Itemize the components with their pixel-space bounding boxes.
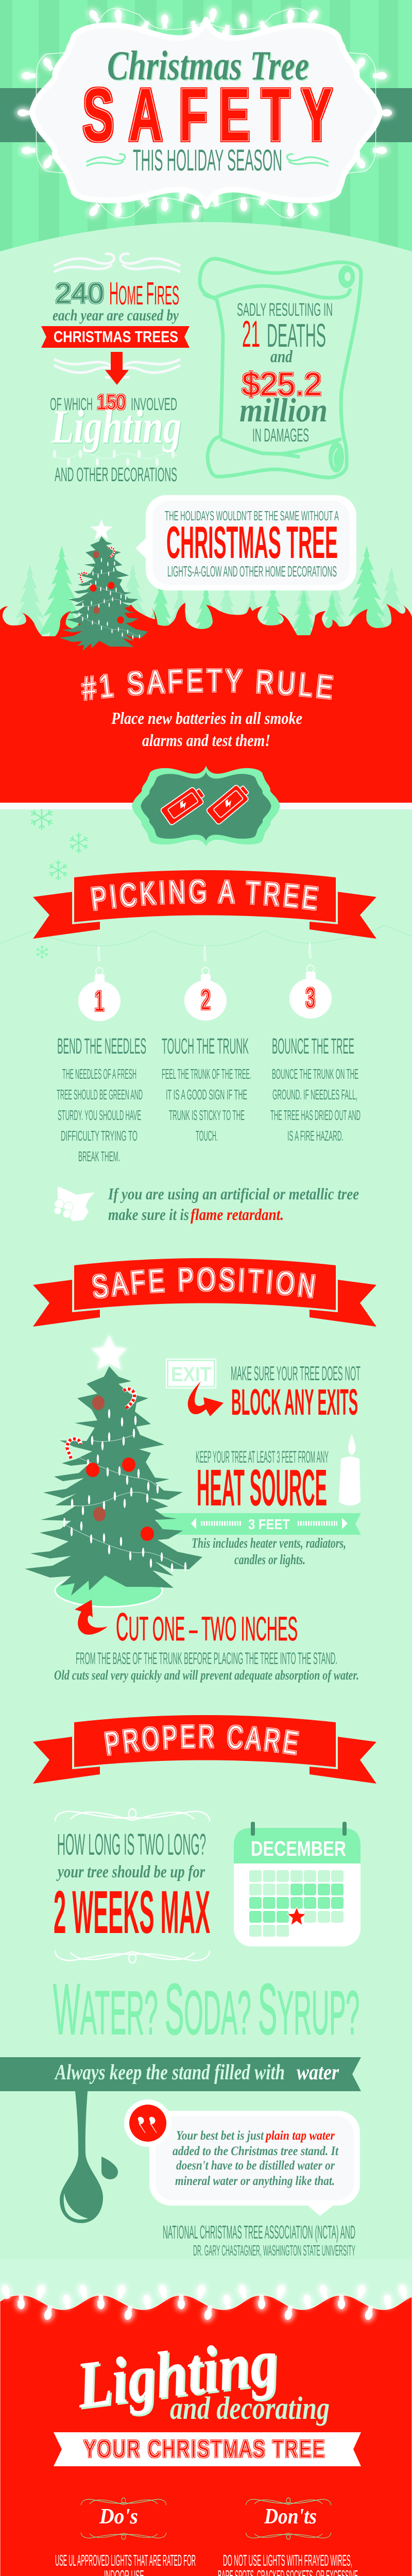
quote text (173, 2129, 339, 2188)
text: batteries line 2: alarms and test them! (142, 732, 270, 750)
text: BEND THE NEEDLES (57, 1034, 146, 1059)
bulbs (0, 2282, 410, 2323)
arrow: down (105, 352, 129, 385)
note: artificial tree (108, 1184, 359, 1224)
arrow: to exit text (188, 1381, 224, 1416)
text: batteries line 1: Place new batteries in all smoke (111, 709, 302, 728)
stat: 240 home fires (41, 276, 190, 486)
quote text: plain tap water (265, 2129, 335, 2143)
banner: safe position (33, 1258, 376, 1327)
donts header (246, 2498, 331, 2539)
title plaque (32, 20, 380, 206)
panel: scroll: IN DAMAGES (252, 425, 309, 446)
small decorated tree (59, 520, 148, 651)
bauble 1: 1 (94, 985, 104, 1017)
banner: stand filled with water (0, 2057, 361, 2091)
tree skirt (55, 1574, 162, 1607)
attribution (163, 2222, 355, 2259)
text: STURDY. YOU SHOULD HAVE (58, 1107, 141, 1123)
light string wires (36, 8, 376, 218)
day cells (249, 1870, 344, 1937)
label: 3 FEET (248, 1516, 290, 1532)
ornament: left swash (87, 154, 125, 166)
ornament: swirls above stats (54, 254, 180, 272)
icon: water drip (60, 2091, 118, 2223)
quote bubble (124, 2099, 360, 2216)
Lighting script: Lighting (51, 400, 181, 453)
banner: safe position: SAFE POSITION (92, 1267, 316, 1298)
banner: stand filled with water: water (297, 2061, 339, 2084)
number 240: 240 (55, 277, 104, 309)
panel: scroll (200, 259, 361, 478)
bauble 3: 3 (306, 983, 315, 1013)
panel: speech bubble (135, 495, 356, 590)
red banner (41, 326, 190, 348)
flake behind strip (29, 805, 54, 830)
text: your tree: your tree should be up for (56, 1862, 205, 1882)
ornament: right swash (287, 154, 329, 166)
banner: stand filled with water: Always keep the stand filled with (54, 2061, 285, 2084)
text: heater vents: candles or lights. (234, 1552, 305, 1567)
title: SAFETY: SAFETY (83, 73, 332, 157)
icon: quote mark (129, 2105, 166, 2142)
light bulbs (15, 5, 394, 222)
bauble 2 (184, 945, 227, 1021)
stat: $25.2: $25.2 (242, 367, 322, 402)
column 3: bounce the tree (270, 1034, 360, 1144)
icon: battery right (206, 782, 252, 825)
million: million (239, 392, 328, 429)
donts header: Don'ts (264, 2505, 317, 2529)
panel: red safety rule with flames (0, 603, 412, 803)
bauble 2: 2 (201, 985, 210, 1015)
icon: battery left (160, 784, 208, 826)
snowflake (48, 860, 68, 880)
dos header (81, 2498, 166, 2539)
note: artificial tree: make sure it is (108, 1205, 189, 1224)
panel: scroll: 21 (242, 314, 260, 355)
big decorated tree (25, 1366, 202, 1596)
star marker (287, 1907, 306, 1925)
quote text: added to the Christmas tree stand. It (173, 2144, 339, 2158)
3 feet ribbon (157, 1513, 361, 1535)
banner: picking a tree (33, 870, 376, 939)
white strip (0, 803, 412, 809)
white banner (54, 2432, 361, 2466)
of which 150 involved: INVOLVED (131, 395, 177, 414)
string lights (53, 450, 178, 466)
bauble 3 (289, 942, 332, 1019)
dos list (55, 2551, 196, 2576)
of which 150 involved: OF WHICH (50, 395, 93, 414)
icon: holly (54, 1187, 95, 1221)
column 1: bend the needles (57, 1034, 146, 1164)
quote text: mineral water or anything like that. (175, 2174, 335, 2188)
donts list (218, 2551, 358, 2576)
exit sign: EXIT (171, 1363, 211, 1386)
and decorating: and decorating (170, 2391, 330, 2426)
panel: lighting and decorating red (0, 2259, 412, 2576)
ornament top (55, 1809, 210, 1821)
column 2: touch the trunk: TOUCH. (196, 1128, 218, 1144)
title: Christmas Tree: Christmas Tree (107, 43, 309, 89)
stat: 240 home fires: AND OTHER DECORATIONS (55, 464, 177, 486)
snowflake (68, 833, 89, 853)
banner: picking a tree: PICKING A TREE (91, 879, 319, 911)
Lighting heading: Lighting (72, 2325, 282, 2422)
text: TOUCH THE TRUNK (162, 1034, 249, 1059)
forest (6, 546, 412, 696)
heading: #1 safety rule: #1 SAFETY RULE (81, 668, 334, 701)
text: THE NEEDLES OF A FRESH (62, 1066, 136, 1082)
and: and (270, 347, 293, 366)
text: TREE SHOULD BE GREEN AND (57, 1087, 143, 1103)
note: artificial tree: If you are using an artificial or metallic tree (108, 1184, 359, 1203)
text: heater vents (192, 1535, 346, 1567)
text: IT IS A GOOD SIGN IF THE (166, 1087, 247, 1103)
text: heater vents: This includes heater vents, radiators, (192, 1535, 346, 1551)
panel: header (0, 0, 412, 268)
quote text: Your best bet is just (176, 2129, 264, 2143)
of which 150 involved (50, 391, 177, 414)
bauble 1 (78, 946, 121, 1021)
calendar (234, 1822, 360, 1946)
tree star (91, 1334, 128, 1370)
arrow: to base (75, 1600, 108, 1635)
icon: candle (339, 1434, 360, 1505)
quote text: doesn't have to be distilled water or (176, 2159, 335, 2173)
ornament swirls (54, 359, 180, 377)
text: FEEL THE TRUNK OF THE TREE. (162, 1066, 251, 1082)
banner: proper care (33, 1715, 376, 1784)
column 1: bend the needles: DIFFICULTY TRYING TO (61, 1128, 138, 1144)
faint garland (0, 925, 412, 946)
column 2: touch the trunk (162, 1034, 251, 1144)
white banner: YOUR CHRISTMAS TREE (84, 2435, 326, 2462)
text: TRUNK IS STICKY TO THE (169, 1107, 245, 1123)
of which 150 involved: 150 (97, 391, 126, 414)
month label: DECEMBER (251, 1837, 346, 1860)
note: artificial tree: flame retardant. (191, 1205, 284, 1224)
scroll outline (200, 259, 361, 478)
battery plaque (132, 766, 280, 847)
column 1: bend the needles: BREAK THEM. (78, 1148, 120, 1164)
home fires: HOME FIRES (109, 276, 179, 312)
banner: proper care: PROPER CARE (104, 1724, 299, 1756)
dos header: Do's (99, 2505, 138, 2529)
dotted arrows (191, 1518, 348, 1529)
red banner: CHRISTMAS TREES (54, 328, 178, 346)
ornament bottom (55, 1951, 210, 1963)
snowflake (36, 945, 49, 959)
caption: each year are caused by (53, 306, 179, 324)
panel: scroll: DEATHS (267, 317, 326, 354)
